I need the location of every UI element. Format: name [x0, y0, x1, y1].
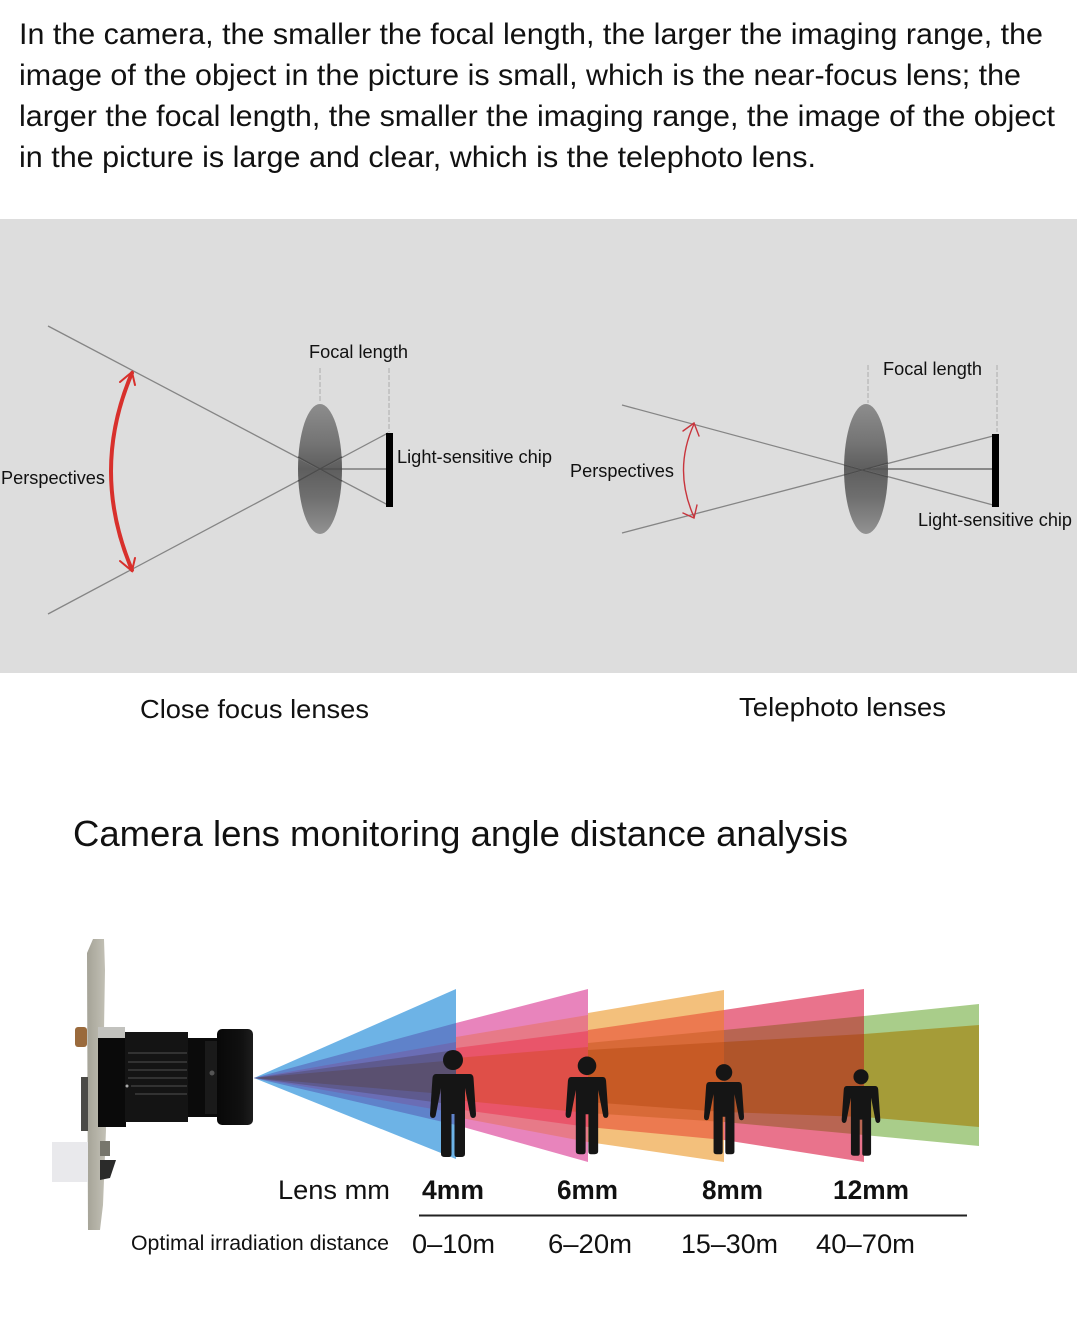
table: lens mm row: [278, 1175, 909, 1205]
label: perspectives: Perspectives: [570, 461, 674, 481]
table: optimal distance row: 15–30m: [681, 1229, 778, 1259]
table: lens mm row: 4mm: [422, 1175, 484, 1205]
red angle arrow: telephoto: [683, 423, 699, 518]
light rays: telephoto: [622, 405, 993, 533]
person at 4mm: [430, 1050, 476, 1157]
fan: 6mm pink: [456, 989, 588, 1162]
panel: lens diagrams background: [0, 219, 1077, 673]
intro paragraph: [19, 18, 1055, 174]
fan: 8mm orange: [588, 990, 724, 1162]
diagram: telephoto lens: [570, 359, 1072, 534]
label: light-sensitive chip: Light-sensitive chip: [397, 447, 552, 467]
label: focal length: Focal length: [309, 342, 408, 362]
intro paragraph: larger the focal length, the smaller the imaging range, the image of the object: [19, 100, 1055, 133]
table rule: [419, 1214, 967, 1216]
white connector: [52, 1142, 88, 1182]
table: optimal distance row: Optimal irradiation distance: [131, 1232, 389, 1255]
table: lens mm row: Lens mm: [278, 1175, 390, 1205]
fan: 12mm rose: [724, 989, 864, 1162]
viewing angle fans: [254, 989, 979, 1162]
table: optimal distance row: 0–10m: [412, 1229, 495, 1259]
table: lens mm row: 6mm: [557, 1175, 618, 1205]
light rays: close focus: [48, 326, 388, 614]
intro paragraph: in the picture is large and clear, which is the telephoto lens.: [19, 141, 816, 174]
board components: [75, 1027, 125, 1180]
camera module photo: [52, 939, 253, 1230]
chip: close focus: [386, 433, 393, 507]
red angle arrow: close focus: [111, 372, 135, 571]
label: light-sensitive chip: Light-sensitive chip: [918, 510, 1072, 530]
table: lens mm row: 12mm: [833, 1175, 909, 1205]
table: optimal distance row: 40–70m: [816, 1229, 915, 1259]
caption: close focus lenses: Close focus lenses: [140, 694, 369, 724]
fan: green far range: [864, 1004, 979, 1146]
section title: Camera lens monitoring angle distance analysis: [73, 813, 848, 854]
diagram: close focus lens: [1, 326, 552, 614]
chip: telephoto: [992, 434, 999, 507]
person at 8mm: [704, 1064, 744, 1154]
intro paragraph: In the camera, the smaller the focal length, the larger the imaging range, the: [19, 18, 1043, 51]
circuit board: [87, 939, 106, 1230]
person at 6mm: [566, 1057, 608, 1154]
label: focal length: Focal length: [883, 359, 982, 379]
label: perspectives: Perspectives: [1, 468, 105, 488]
lens: close focus: [298, 404, 342, 534]
fan: 4mm blue: [254, 989, 456, 1159]
caption: telephoto lenses: Telephoto lenses: [739, 692, 946, 722]
lens: telephoto: [844, 404, 888, 534]
intro paragraph: image of the object in the picture is small, which is the near-focus lens; the: [19, 59, 1021, 92]
table: lens mm row: 8mm: [702, 1175, 763, 1205]
focal length markers: close focus: [320, 368, 389, 432]
table: optimal distance row: 6–20m: [548, 1229, 632, 1259]
table: optimal distance row: [131, 1229, 915, 1259]
person at 12mm: [842, 1069, 880, 1156]
focal length markers: telephoto: [868, 365, 997, 432]
lens barrel: [98, 1029, 253, 1127]
